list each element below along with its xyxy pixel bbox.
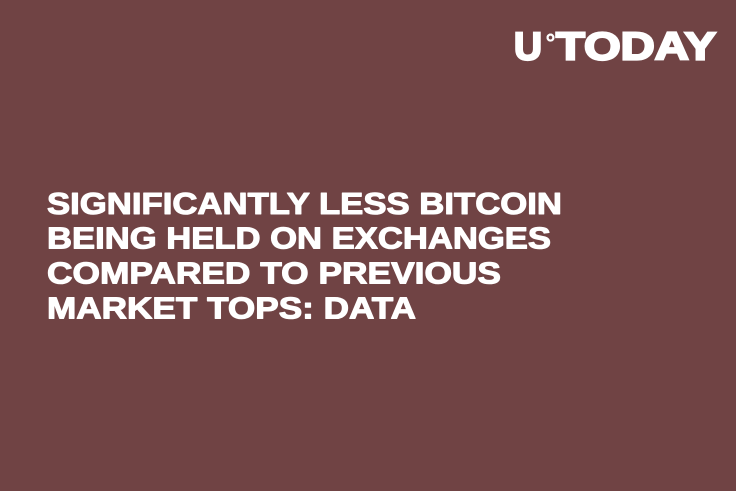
logo: U.Today — [514, 26, 716, 68]
title: MARKET TOPS: DATA — [47, 290, 416, 326]
logo: U.Today: ° — [546, 29, 556, 57]
title: SIGNIFICANTLY LESS BITCOIN — [47, 186, 562, 221]
title: BEING HELD ON EXCHANGES — [47, 220, 551, 256]
title — [47, 186, 562, 326]
logo: U.Today: TODAY — [556, 26, 716, 68]
logo: U.Today: U — [514, 26, 542, 68]
title: COMPARED TO PREVIOUS — [47, 256, 501, 290]
